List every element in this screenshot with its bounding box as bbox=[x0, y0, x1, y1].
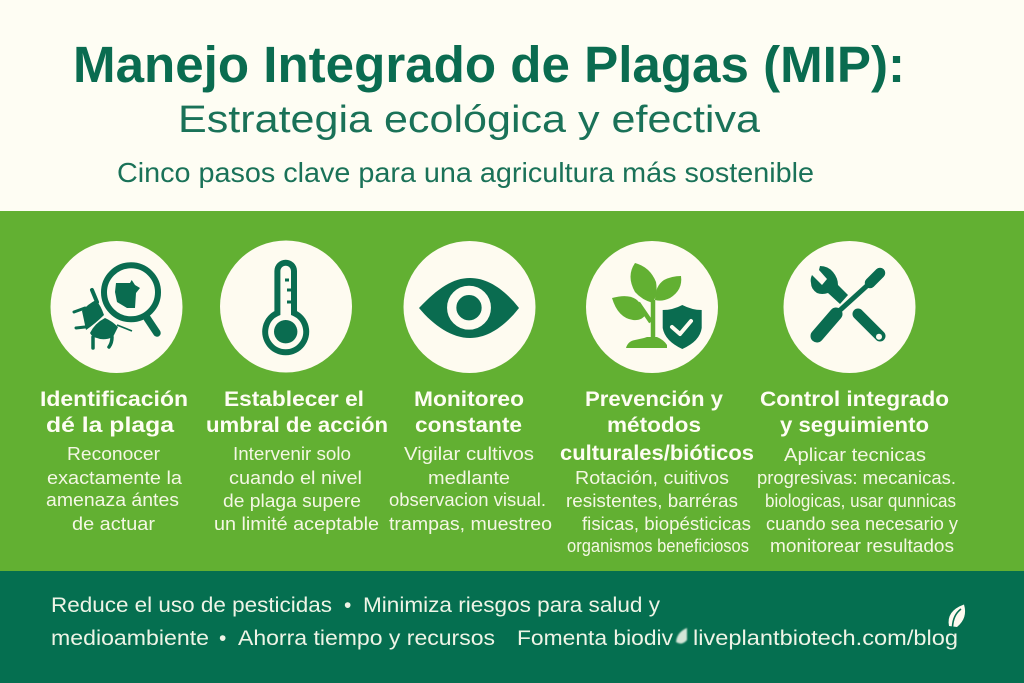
description: observacion visual. bbox=[389, 490, 546, 510]
footer benefits text: Fomenta biodiv bbox=[517, 627, 674, 650]
description: Reconocer bbox=[67, 444, 160, 464]
description: Vigilar cultivos bbox=[404, 444, 534, 464]
heading: dé la plaga bbox=[46, 414, 174, 437]
heading: constante bbox=[415, 414, 522, 437]
description: trampas, muestreo bbox=[389, 514, 552, 534]
icon: thermometer bbox=[220, 240, 352, 372]
description bbox=[214, 444, 379, 534]
footer benefits text: medioambiente bbox=[51, 627, 209, 650]
heading: Prevención y bbox=[585, 388, 723, 411]
heading bbox=[40, 388, 188, 437]
heading bbox=[560, 388, 754, 465]
description: de plaga supere bbox=[223, 491, 361, 511]
description: medlante bbox=[428, 468, 510, 488]
description: Intervenir solo bbox=[233, 444, 351, 464]
step 1: identification bbox=[40, 241, 188, 534]
icon: leaf logo bbox=[949, 604, 965, 627]
description: cuando sea necesario y bbox=[766, 514, 958, 534]
heading bbox=[414, 388, 524, 437]
description: resistentes, barréras bbox=[566, 491, 738, 511]
description: monitorear resultados bbox=[770, 536, 954, 556]
footer benefits text bbox=[51, 594, 674, 650]
description: biologicas, usar qunnicas bbox=[765, 491, 956, 511]
description: progresivas: mecanicas. bbox=[757, 468, 956, 488]
panel: five steps band bbox=[0, 211, 1024, 571]
description: cuando el nivel bbox=[229, 468, 362, 488]
heading: umbral de acción bbox=[206, 414, 388, 437]
description bbox=[46, 444, 183, 534]
step 5: integrated control bbox=[757, 241, 958, 556]
panel: benefits footer band bbox=[0, 571, 1024, 683]
footer benefits text: Reduce el uso de pesticidas bbox=[51, 594, 332, 617]
step 3: monitoring bbox=[389, 241, 552, 534]
description: exactamente la bbox=[47, 468, 183, 488]
title: Manejo Integrado de Plagas (MIP): bbox=[73, 36, 905, 93]
heading: y seguimiento bbox=[780, 414, 929, 437]
heading: Identificación bbox=[40, 388, 188, 411]
footer benefits text: • bbox=[219, 627, 226, 650]
heading bbox=[206, 388, 388, 437]
description: Rotación, cuitivos bbox=[575, 468, 729, 488]
description: organismos beneficiosos bbox=[567, 536, 749, 556]
heading: Control integrado bbox=[760, 388, 949, 411]
heading: Monitoreo bbox=[414, 388, 524, 411]
footer website link: liveplantbiotech.com/blog bbox=[693, 627, 958, 650]
description bbox=[566, 468, 751, 556]
smudge mark bbox=[676, 628, 687, 644]
description bbox=[389, 444, 552, 534]
description bbox=[757, 445, 958, 556]
heading bbox=[760, 388, 949, 437]
tagline: Cinco pasos clave para una agricultura más sostenible bbox=[117, 157, 814, 188]
icon: crossed wrench and screwdriver bbox=[784, 241, 916, 373]
description: Aplicar tecnicas bbox=[784, 445, 926, 465]
footer benefits text: Minimiza riesgos para salud y bbox=[363, 594, 661, 617]
description: fisicas, biopésticicas bbox=[582, 514, 751, 534]
header bbox=[73, 36, 905, 188]
icon: plant with shield bbox=[586, 241, 718, 373]
footer benefits text: Ahorra tiempo y recursos bbox=[238, 627, 495, 650]
description: amenaza ántes bbox=[46, 490, 179, 510]
subtitle: Estrategia ecológica y efectiva bbox=[178, 99, 761, 141]
step 4: prevention bbox=[560, 241, 754, 556]
description: un limité aceptable bbox=[214, 514, 379, 534]
step 2: action threshold bbox=[206, 240, 388, 534]
icon: beetle under magnifying glass bbox=[50, 241, 182, 373]
heading: culturales/bióticos bbox=[560, 442, 754, 465]
icon: eye bbox=[404, 241, 536, 373]
footer benefits text: • bbox=[344, 594, 351, 617]
description: de actuar bbox=[72, 514, 155, 534]
heading: Establecer el bbox=[224, 388, 364, 411]
heading: métodos bbox=[607, 414, 701, 437]
